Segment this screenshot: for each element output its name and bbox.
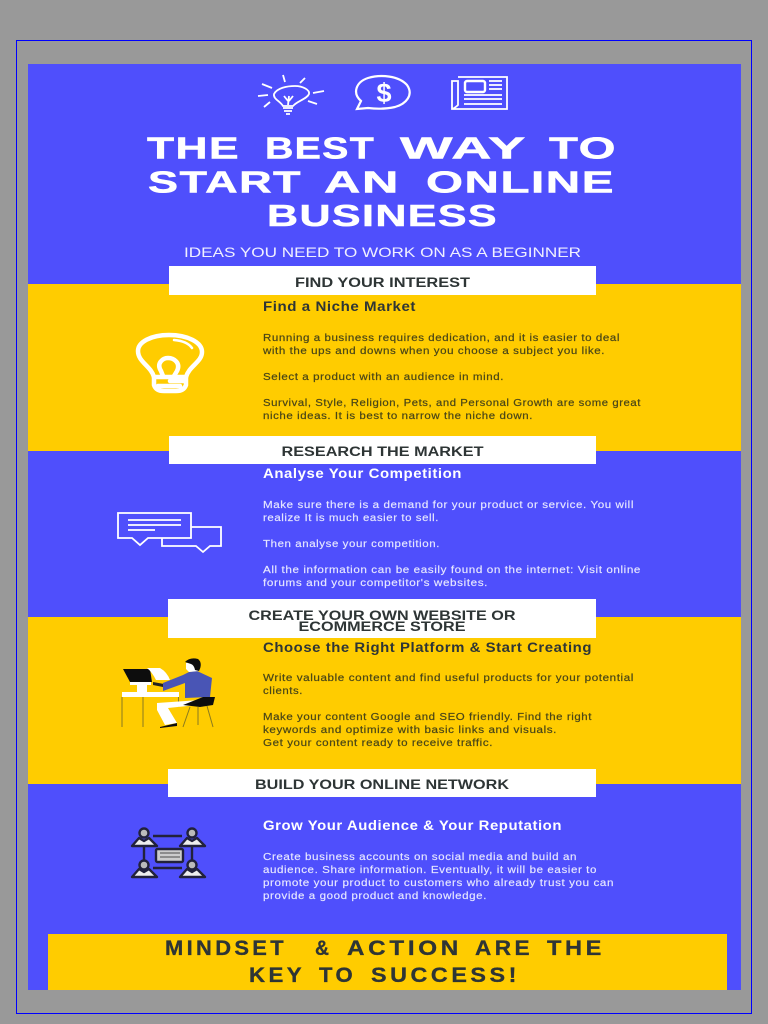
heading band (169, 266, 596, 295)
callout: closing message: ACTION (347, 937, 462, 960)
panel: find your interest (28, 266, 741, 451)
title: BUSINESS (267, 198, 498, 233)
icon: light bulb (258, 75, 324, 114)
header icons (258, 75, 507, 114)
body text: provide a good product and knowledge. (263, 891, 487, 902)
body text: forums and your competitor's websites. (263, 578, 488, 589)
panel: create your own website (28, 599, 741, 784)
icon: person at desk (122, 658, 215, 728)
body text (263, 673, 634, 749)
body text (262, 333, 641, 422)
subheading: Choose the Right Platform & Start Creating (263, 640, 592, 655)
title: BEST (265, 130, 375, 166)
heading band: CREATE YOUR OWN WEBSITE OR (248, 608, 516, 623)
body text: Make your content Google and SEO friendly. Find the right (263, 712, 592, 723)
title: START (148, 164, 302, 200)
title: WAY (400, 130, 527, 166)
heading band (168, 599, 596, 638)
icon: dollar speech bubble: $ (376, 78, 392, 108)
title: TO (549, 130, 617, 166)
heading band (168, 769, 596, 797)
icon: chat bubbles (118, 513, 221, 552)
body text: with the ups and downs when you choose a subject you like. (262, 346, 605, 357)
body text: Make sure there is a demand for your product or service. You will (263, 500, 634, 511)
icon: newspaper (452, 77, 507, 109)
title (147, 130, 617, 233)
body text: audience. Share information. Eventually, it will be easier to (263, 865, 597, 876)
subheading: Find a Niche Market (263, 299, 416, 314)
callout: closing message: THE (547, 937, 605, 960)
body text: keywords and optimize with basic links and visuals. (263, 725, 557, 736)
callout: closing message: TO (319, 964, 356, 987)
callout: closing message: SUCCESS! (371, 964, 520, 987)
callout: closing message (48, 934, 727, 990)
body text: Get your content ready to receive traffic. (263, 738, 493, 749)
title: THE (147, 130, 240, 166)
body text: promote your product to customers who already trust you can (263, 878, 614, 889)
body text: niche ideas. It is best to narrow the niche down. (263, 411, 533, 422)
subheading: Analyse Your Competition (263, 466, 462, 481)
subtitle: IDEAS YOU NEED TO WORK ON AS A BEGINNER (184, 244, 581, 260)
icon: dollar speech bubble (356, 76, 410, 109)
callout: closing message: ARE (475, 937, 533, 960)
panel: build your online network (132, 769, 614, 902)
body text (263, 500, 641, 589)
heading band: FIND YOUR INTEREST (295, 275, 471, 290)
heading band: RESEARCH THE MARKET (282, 444, 484, 459)
title: AN (324, 164, 400, 200)
body text: All the information can be easily found on the internet: Visit online (263, 565, 641, 576)
title: ONLINE (426, 164, 615, 200)
heading band (169, 436, 596, 464)
subheading: Grow Your Audience & Your Reputation (263, 818, 562, 833)
callout: closing message: MINDSET (165, 937, 287, 960)
body text: Then analyse your competition. (263, 539, 440, 550)
heading band: ECOMMERCE STORE (298, 619, 466, 634)
icon: light bulb (138, 335, 202, 391)
body text: Running a business requires dedication, and it is easier to deal (263, 333, 620, 344)
heading band: BUILD YOUR ONLINE NETWORK (255, 777, 509, 792)
body text (263, 852, 614, 902)
callout: closing message: & (315, 937, 332, 960)
body text: Create business accounts on social media and build an (263, 852, 577, 863)
body text: realize It is much easier to sell. (263, 513, 439, 524)
body text: Survival, Style, Religion, Pets, and Personal Growth are some great (263, 398, 641, 409)
panel: research the market (118, 436, 641, 589)
body text: Select a product with an audience in mind. (263, 372, 504, 383)
body text: Write valuable content and find useful products for your potential (263, 673, 634, 684)
body text: clients. (263, 686, 303, 697)
icon: network of people (132, 828, 205, 877)
callout: closing message: KEY (249, 964, 305, 987)
